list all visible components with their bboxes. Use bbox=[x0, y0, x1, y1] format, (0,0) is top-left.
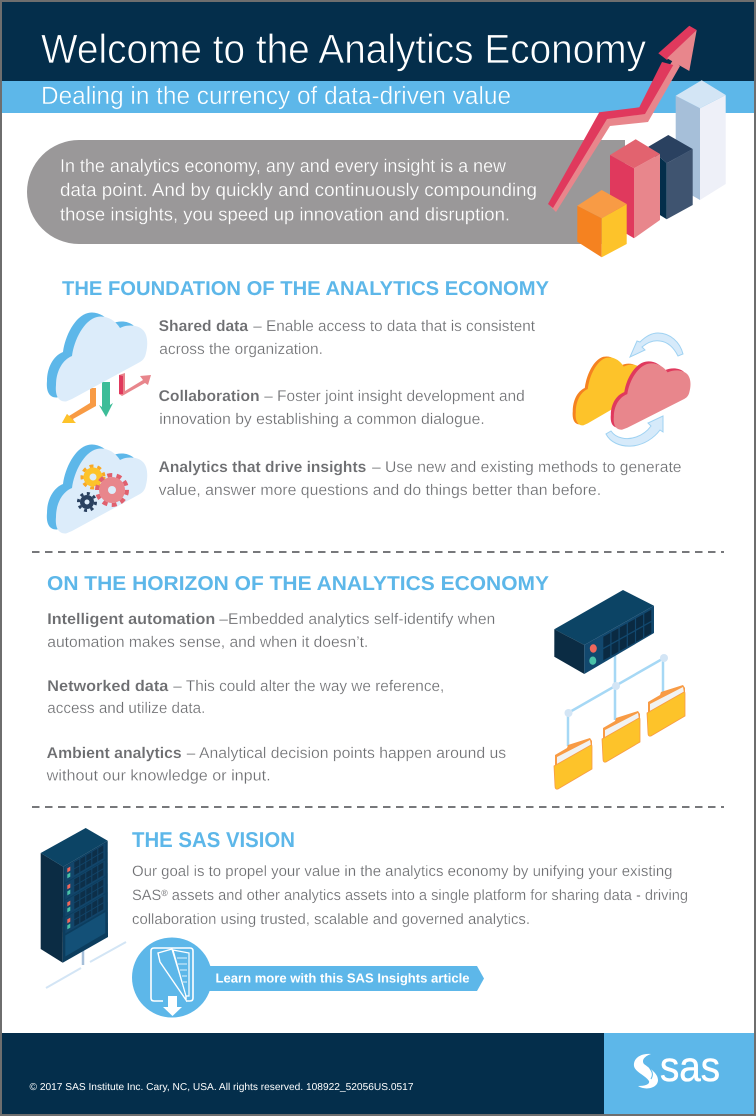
subtitle: Dealing in the currency of data-driven value bbox=[41, 82, 511, 110]
text: SAS vision paragraph: SAS bbox=[132, 887, 162, 904]
text: intelligent automation: –Embedded analytics self-identify when bbox=[219, 611, 495, 628]
heading: horizon: ON THE HORIZON OF THE ANALYTICS ECONOMY bbox=[47, 573, 550, 595]
text: SAS vision paragraph: assets and other analytics assets into a single platform for sharing data - driving bbox=[168, 887, 688, 904]
text: networked data: – This could alter the way we reference, bbox=[173, 678, 444, 695]
text: collaboration: – Foster joint insight development and bbox=[264, 388, 525, 405]
intro pill: those insights, you speed up innovation and disruption. bbox=[60, 204, 510, 224]
icon: server rack bbox=[41, 828, 126, 988]
text: networked data bbox=[47, 678, 444, 717]
text: networked data: Networked data bbox=[47, 678, 169, 695]
icon: cloud with data arrows bbox=[47, 313, 151, 423]
text: shared data: across the organization. bbox=[159, 341, 323, 358]
heading: the SAS vision: THE SAS VISION bbox=[132, 828, 295, 852]
text: intelligent automation bbox=[47, 611, 495, 651]
text: collaboration bbox=[159, 388, 525, 428]
text: ambient analytics bbox=[46, 745, 506, 784]
intro pill: In the analytics economy, any and every insight is a new bbox=[60, 155, 507, 176]
text: intelligent automation: automation makes sense, and when it doesn’t. bbox=[47, 634, 368, 651]
text: collaboration: innovation by establishing a common dialogue. bbox=[159, 411, 485, 428]
footer band bbox=[2, 1033, 754, 1114]
text: SAS vision paragraph: Our goal is to propel your value in the analytics economy by unifying your existing bbox=[132, 863, 672, 880]
icon: bar chart with rising arrow bbox=[548, 26, 726, 257]
icon: two clouds syncing bbox=[573, 333, 690, 446]
text: shared data bbox=[159, 318, 536, 358]
text: intelligent automation: Intelligent automation bbox=[47, 611, 215, 628]
text: SAS vision paragraph: collaboration using trusted, scalable and governed analytics. bbox=[132, 911, 530, 928]
text: ambient analytics: without our knowledge or input. bbox=[46, 768, 271, 784]
text: shared data: – Enable access to data that is consistent bbox=[253, 318, 536, 335]
copyright: © 2017 SAS Institute Inc. Cary, NC, USA. All rights reserved. 108922_52056US.0517 bbox=[30, 1082, 414, 1093]
title: Welcome to the Analytics Economy bbox=[41, 26, 646, 72]
callout: learn more button: Learn more with this SAS Insights article bbox=[216, 970, 470, 986]
text: collaboration: Collaboration bbox=[159, 388, 260, 405]
heading: foundation: THE FOUNDATION OF THE ANALYTICS ECONOMY bbox=[62, 278, 550, 300]
header band bbox=[2, 2, 754, 113]
icon: cloud with gears bbox=[47, 445, 147, 534]
text: analytics that drive insights: Analytics that drive insights bbox=[159, 459, 366, 476]
logo: SAS bbox=[634, 1043, 720, 1090]
icon: network server with folders bbox=[554, 590, 685, 789]
text: SAS vision paragraph bbox=[132, 863, 688, 928]
text: networked data: access and utilize data. bbox=[47, 700, 205, 717]
text: ambient analytics: – Analytical decision points happen around us bbox=[187, 745, 506, 762]
text: ambient analytics: Ambient analytics bbox=[47, 745, 182, 762]
logo: SAS: sas bbox=[660, 1043, 720, 1090]
intro pill bbox=[27, 140, 625, 244]
text: analytics that drive insights: – Use new and existing methods to generate bbox=[372, 459, 682, 476]
text: analytics that drive insights bbox=[159, 459, 682, 499]
callout: learn more button bbox=[132, 938, 484, 1018]
text: analytics that drive insights: value, answer more questions and do things better than before. bbox=[159, 482, 601, 499]
icon: document download bbox=[151, 948, 193, 1016]
text: SAS vision paragraph: ® bbox=[161, 888, 168, 898]
text: shared data: Shared data bbox=[159, 318, 248, 335]
intro pill: data point. And by quickly and continuously compounding bbox=[60, 179, 537, 200]
